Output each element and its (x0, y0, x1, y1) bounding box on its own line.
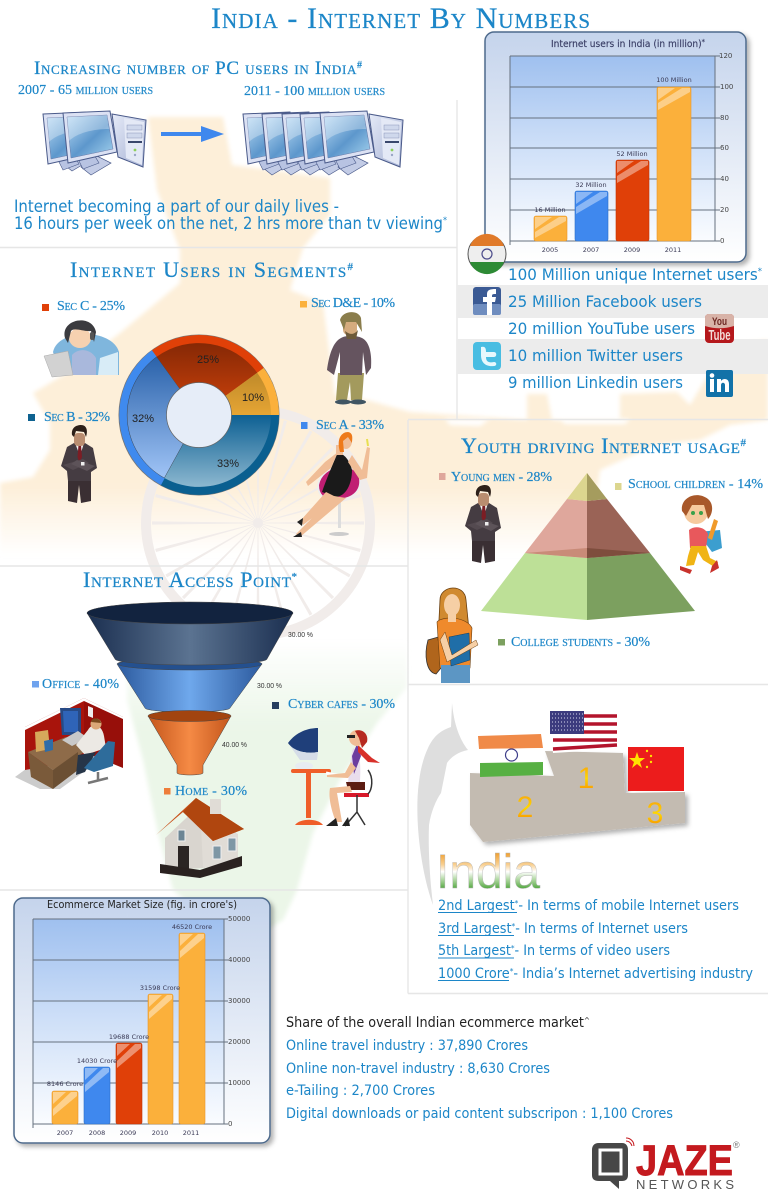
chart: Internet users in India: 32 Million (575, 181, 607, 189)
chart: Internet users in India: 16 Million (534, 206, 566, 214)
bars (52, 933, 205, 1124)
chart: Internet users in India: 80 (720, 114, 729, 122)
stat: unique users: * (758, 267, 762, 277)
stat: Twitter: 10 million Twitter users (508, 346, 683, 365)
donut chart: 25% (197, 354, 219, 366)
chart: ecommerce market size: 14030 Crore (77, 1057, 117, 1065)
legend: Sec D&E: Sec D&E - 10% (311, 296, 395, 311)
stat: YouTube: 20 million YouTube users (508, 319, 695, 338)
legend: Young men: Young men - 28% (451, 470, 552, 485)
chart: ecommerce market size: 31598 Crore (140, 984, 180, 992)
text: daily lives: 16 hours per week on the net, 2 hrs more than tv viewing (14, 214, 491, 233)
chart: ecommerce market size: 20000 (228, 1038, 250, 1046)
podium numbers: 1 (578, 762, 594, 795)
figure: office worker at desk (15, 698, 123, 789)
icon: YouTube: Tube (708, 327, 730, 344)
chart: Internet users in India: 20 (720, 206, 729, 214)
legend: College students: College students - 30% (511, 635, 650, 650)
ranking list: 5th Largest (438, 943, 518, 959)
chart: ecommerce market size: 46520 Crore (172, 923, 212, 931)
podium (470, 751, 685, 842)
donut chart (118, 334, 280, 496)
chart: ecommerce market size: 2010 (152, 1129, 168, 1137)
background: Ashoka chakra wheel (146, 411, 370, 635)
chart: ecommerce market size: 10000 (228, 1079, 250, 1087)
ranking list: - In terms of mobile Internet users (518, 898, 739, 914)
chart: ecommerce market size: 19688 Crore (109, 1033, 149, 1041)
figure: young man (465, 485, 501, 563)
logo: Jaze Networks: ® (733, 1140, 740, 1150)
legend: Sec C: Sec C - 25% (57, 299, 125, 314)
label: 2007 users: 2007 - 65 million users (18, 83, 153, 98)
chart: ecommerce market size: 2007 (57, 1129, 73, 1137)
legend: Sec A: Sec A - 33% (316, 418, 384, 433)
icon: five computers (243, 111, 403, 175)
heading: segments: # (348, 261, 354, 273)
funnel value labels: 40.00 % (222, 740, 247, 749)
figure: college girl (426, 588, 478, 683)
chart: Internet users in India: 2011 (665, 246, 681, 254)
background: India map silhouette (0, 117, 768, 932)
bars (534, 87, 691, 241)
chart: ecommerce market size: 30000 (228, 997, 250, 1005)
donut chart: 33% (217, 458, 239, 470)
ranking list: 3rd Largest (438, 921, 518, 937)
text block: ecommerce share (286, 1015, 673, 1122)
text: daily lives: Internet becoming a part of our daily lives - (14, 197, 339, 216)
label: 2011 users: 2011 - 100 million users (244, 84, 385, 99)
chart: ecommerce market size: 2008 (89, 1129, 105, 1137)
figure: Sec A woman in chair (293, 432, 370, 537)
donut chart: 32% (132, 413, 154, 425)
ranking list: * (510, 967, 513, 976)
logo: Jaze Networks: NETWORKS (636, 1177, 734, 1192)
arrow: growth (161, 126, 224, 142)
heading: youth: # (740, 437, 746, 449)
flag: USA (550, 711, 617, 753)
ranking list: * (511, 944, 515, 953)
ranking list: 2nd Largest (438, 898, 521, 914)
panel: youth driving usage (426, 433, 763, 683)
logo: Jaze Networks (592, 1137, 740, 1192)
text block: ecommerce share: ^ (584, 1016, 590, 1025)
arrow: curved upward (417, 703, 468, 905)
funnel value labels (222, 630, 313, 749)
India wordmark: India (436, 846, 540, 899)
chart: Internet users in India: Internet users in India (in million) (551, 39, 709, 50)
icon: two computers (43, 111, 146, 175)
flag: India (478, 734, 543, 777)
podium numbers: 2 (517, 791, 533, 824)
heading: PC users: Increasing number of PC users in India (34, 58, 356, 79)
chart: Internet users in India: 2009 (624, 246, 640, 254)
figure: Sec C call-centre woman (44, 320, 119, 377)
chart: ecommerce market size: 8146 Crore (47, 1080, 83, 1088)
icon: India flag badge (468, 234, 506, 274)
chart: ecommerce market size (14, 898, 270, 1143)
panel: global rankings podium (417, 703, 753, 982)
panel: Internet users in segments (28, 257, 395, 537)
heading: access point: * (292, 571, 297, 583)
ranking list: * (515, 899, 518, 908)
figure: Sec D&E poor man (327, 312, 371, 404)
stat: unique users: 100 Million unique Internet users (508, 265, 768, 284)
text block: ecommerce share: Share of the overall Indian ecommerce market (286, 1015, 613, 1031)
icon: house (156, 798, 244, 878)
pyramid chart (481, 473, 695, 620)
ranking list: - In terms of video users (515, 943, 670, 959)
chart: Internet users in India: 52 Million (616, 150, 648, 158)
heading: segments: Internet Users in Segments (70, 257, 346, 282)
chart: ecommerce market size: 2011 (183, 1129, 199, 1137)
legend: Home: Home - 30% (175, 784, 247, 799)
legend: Office: Office - 40% (42, 677, 119, 692)
logo: Jaze Networks: JAZE (636, 1137, 733, 1185)
ranking list: - India’s Internet advertising industry (513, 966, 753, 982)
figure: school boy (680, 495, 722, 574)
text: daily lives: * (443, 216, 447, 226)
stat: LinkedIn: 9 million Linkedin users (508, 373, 683, 392)
chart: Internet users in India: 120 (719, 52, 732, 60)
donut chart: 10% (242, 392, 264, 404)
icon: Twitter (473, 342, 501, 370)
chart: ecommerce market size: Ecommerce Market Size (fig. in crore's) (47, 899, 237, 911)
funnel chart (87, 602, 293, 775)
heading: youth: Youth driving Internet usage (461, 433, 740, 458)
icon: logo speech square (592, 1138, 634, 1189)
chart: Internet users in India: 60 (720, 144, 729, 152)
icon: LinkedIn (706, 370, 733, 397)
chart: Internet users in India: 100 (720, 83, 733, 91)
flag: China (628, 747, 684, 791)
ranking list: 1000 Crore (438, 966, 516, 982)
ranking list (438, 898, 753, 982)
chart: ecommerce market size: 40000 (228, 956, 250, 964)
podium numbers: 3 (647, 797, 663, 830)
chart: Internet users in India: 40 (720, 175, 729, 183)
podium numbers (517, 762, 663, 830)
chart: Internet users in India: 0 (720, 237, 724, 245)
stat: Facebook: 25 Million Facebook users (508, 292, 702, 311)
legend: Sec B: Sec B - 32% (44, 410, 110, 425)
chart: Internet users in India: * (702, 38, 705, 46)
heading: access point: Internet Access Point (83, 567, 291, 592)
chart: Internet users in India: 2005 (542, 246, 558, 254)
funnel value labels: 30.00 % (288, 630, 313, 639)
panel: PC users (14, 58, 447, 233)
chart: Internet users in India: 100 Million (656, 76, 692, 84)
legend: School children: School children - 14% (628, 477, 763, 492)
ranking list: * (512, 922, 515, 931)
figure: Sec B businessman (61, 425, 97, 503)
chart: Internet users in India (485, 32, 746, 262)
text block: ecommerce share: Online non-travel industry : 8,630 Crores (286, 1061, 550, 1077)
chart: ecommerce market size: 50000 (228, 915, 250, 923)
text block: ecommerce share: Online travel industry : 37,890 Crores (286, 1038, 528, 1054)
title: India - Internet By Numbers (211, 2, 590, 35)
text: daily lives (14, 197, 447, 233)
chart: ecommerce market size: 2009 (120, 1129, 136, 1137)
text block: ecommerce share: e-Tailing : 2,700 Crores (286, 1083, 435, 1099)
text block: ecommerce share: Digital downloads or paid content subscripon : 1,100 Crores (286, 1106, 673, 1122)
heading: PC users: # (357, 60, 362, 71)
icon: Facebook (473, 287, 501, 315)
ranking list: - In terms of Internet users (515, 921, 688, 937)
chart: ecommerce market size: 0 (228, 1120, 232, 1128)
icon: YouTube (705, 314, 734, 344)
figure: woman at computer in cyber cafe (288, 728, 380, 826)
chart: Internet users in India: 2007 (583, 246, 599, 254)
funnel value labels: 30.00 % (257, 681, 282, 690)
icon: YouTube: You (712, 316, 727, 328)
legend: Cyber cafes: Cyber cafes - 30% (288, 697, 395, 712)
panel: Internet access point (15, 567, 395, 878)
panel: social media users (457, 234, 768, 397)
